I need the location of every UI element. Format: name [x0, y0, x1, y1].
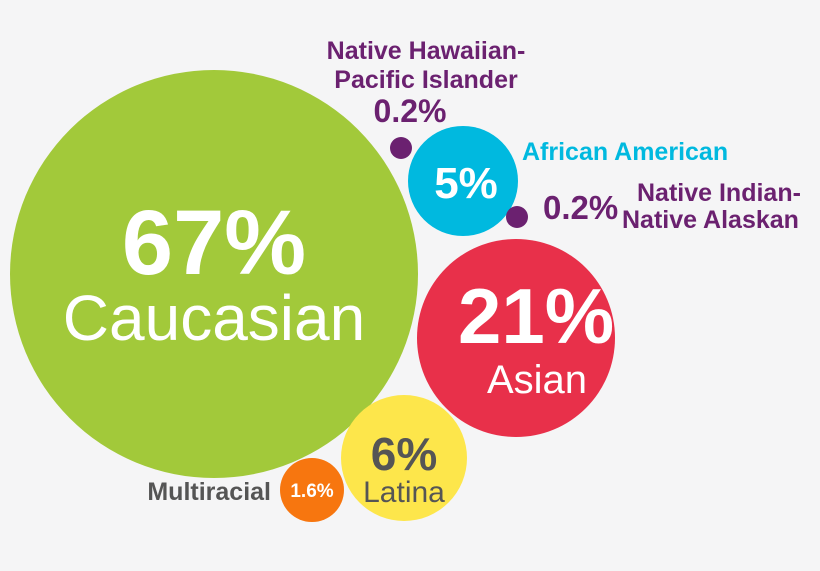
bubble: latina: 6% — [371, 428, 437, 480]
bubble: latina — [341, 395, 467, 521]
bubble: asian: 21% — [458, 272, 614, 360]
label: native hawaiian — [327, 37, 525, 129]
label: native indian: Native Alaskan — [622, 206, 799, 234]
label: native indian — [543, 179, 801, 234]
label: native hawaiian: Pacific Islander — [334, 66, 518, 94]
label: native hawaiian: Native Hawaiian- — [327, 37, 525, 65]
dot: native hawaiian — [390, 137, 412, 159]
bubble: caucasian: 67% — [122, 192, 306, 294]
bubble: multiracial: 1.6% — [290, 481, 334, 502]
bubble: multiracial — [280, 458, 344, 522]
bubble: caucasian: Caucasian — [63, 282, 365, 354]
label: multiracial: Multiracial — [147, 478, 271, 506]
label: native indian: 0.2% — [543, 189, 618, 226]
bubble: latina: Latina — [363, 476, 445, 509]
bubble: caucasian — [10, 70, 418, 478]
label: native hawaiian: 0.2% — [374, 93, 446, 129]
bubble: african american — [408, 126, 518, 236]
dot: native indian — [506, 206, 528, 228]
bubble: african american: 5% — [434, 159, 498, 208]
label: native indian: Native Indian- — [637, 179, 801, 207]
bubble: asian — [417, 239, 615, 437]
label: african american: African American — [522, 138, 728, 166]
bubble: asian: Asian — [487, 358, 587, 402]
